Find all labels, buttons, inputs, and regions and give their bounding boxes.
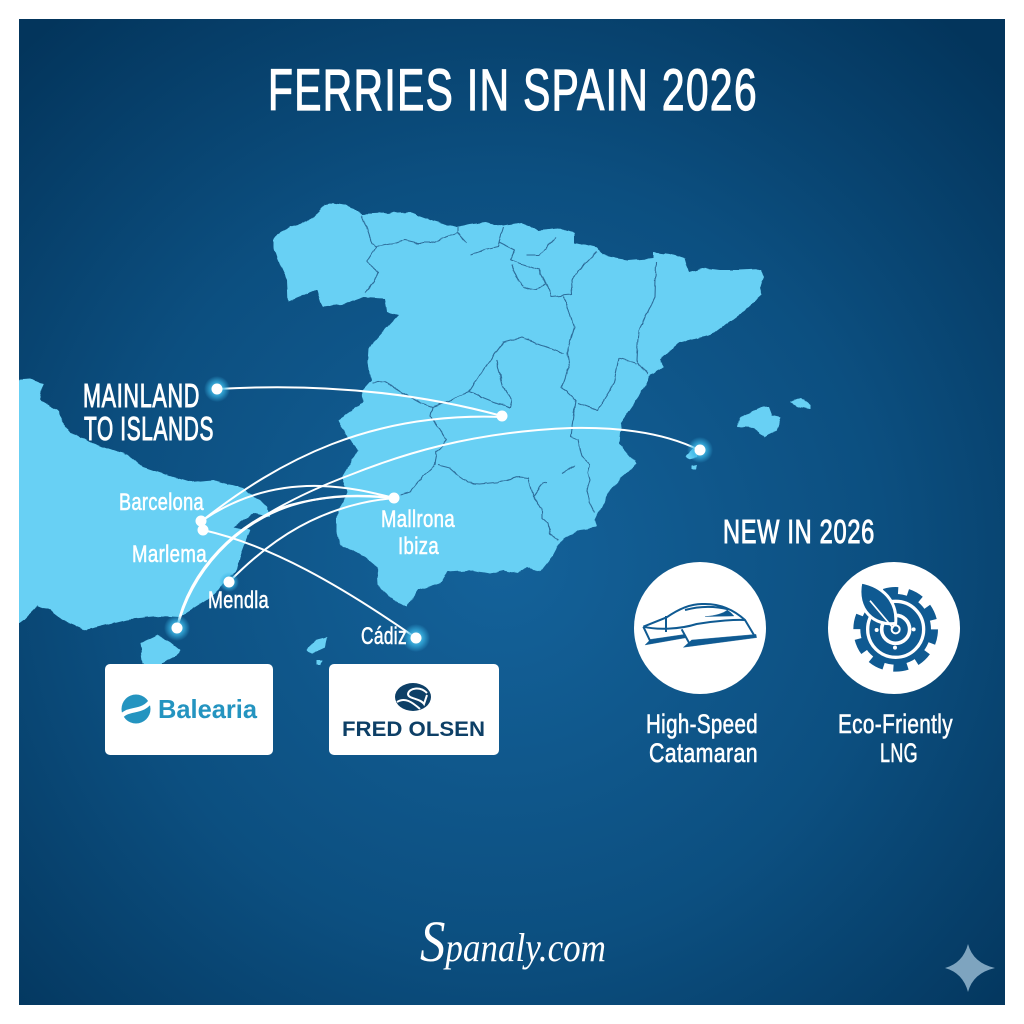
icon: Fred Olsen emblem xyxy=(395,683,431,711)
icon: sparkle xyxy=(945,944,995,992)
feature: eco-friendly LNG xyxy=(828,562,960,768)
icon: gear and leaf xyxy=(858,582,933,667)
heading: mainland to islands xyxy=(83,377,214,447)
heading: mainland to islands: MAINLAND xyxy=(83,377,200,414)
label: High-Speed Catamaran: High-Speed xyxy=(646,709,758,739)
icon: catamaran xyxy=(643,604,757,647)
feature: high-speed catamaran xyxy=(634,562,766,768)
label: High-Speed Catamaran: Catamaran xyxy=(649,738,758,768)
landmass: left coast xyxy=(15,379,270,630)
port labels: Ibiza xyxy=(398,533,439,560)
landmass: Iberian mainland xyxy=(274,203,764,607)
label: Eco-Friently LNG: LNG xyxy=(880,738,918,768)
port labels: Mallrona xyxy=(381,506,455,533)
route endpoints xyxy=(164,376,713,652)
heading: mainland to islands: TO ISLANDS xyxy=(84,410,214,447)
Balearia wordmark: Balearia xyxy=(158,694,258,724)
label: Eco-Friently LNG xyxy=(838,709,953,768)
heading: new in 2026: NEW IN 2026 xyxy=(723,513,875,550)
port labels xyxy=(119,489,455,650)
landmass: small islands xyxy=(140,398,810,665)
card: Fred Olsen logo xyxy=(329,664,499,755)
port labels: Marlema xyxy=(132,541,207,568)
Fred Olsen wordmark: FRED OLSEN xyxy=(342,717,485,741)
footer brand: Spanaly.com xyxy=(420,909,606,974)
port labels: Cádiz xyxy=(361,623,407,650)
icon: Balearia swirl xyxy=(119,694,153,724)
map of Spain and surrounding land xyxy=(15,203,810,665)
regional borders xyxy=(362,215,656,540)
title: FERRIES IN SPAIN 2026 xyxy=(268,58,758,123)
label: High-Speed Catamaran xyxy=(646,709,758,768)
card: Balearia logo xyxy=(105,664,273,755)
label: Eco-Friently LNG: Eco-Friently xyxy=(838,709,953,739)
port labels: Barcelona xyxy=(119,489,204,516)
ferry routes xyxy=(177,387,699,638)
port labels: Mendla xyxy=(208,587,269,614)
